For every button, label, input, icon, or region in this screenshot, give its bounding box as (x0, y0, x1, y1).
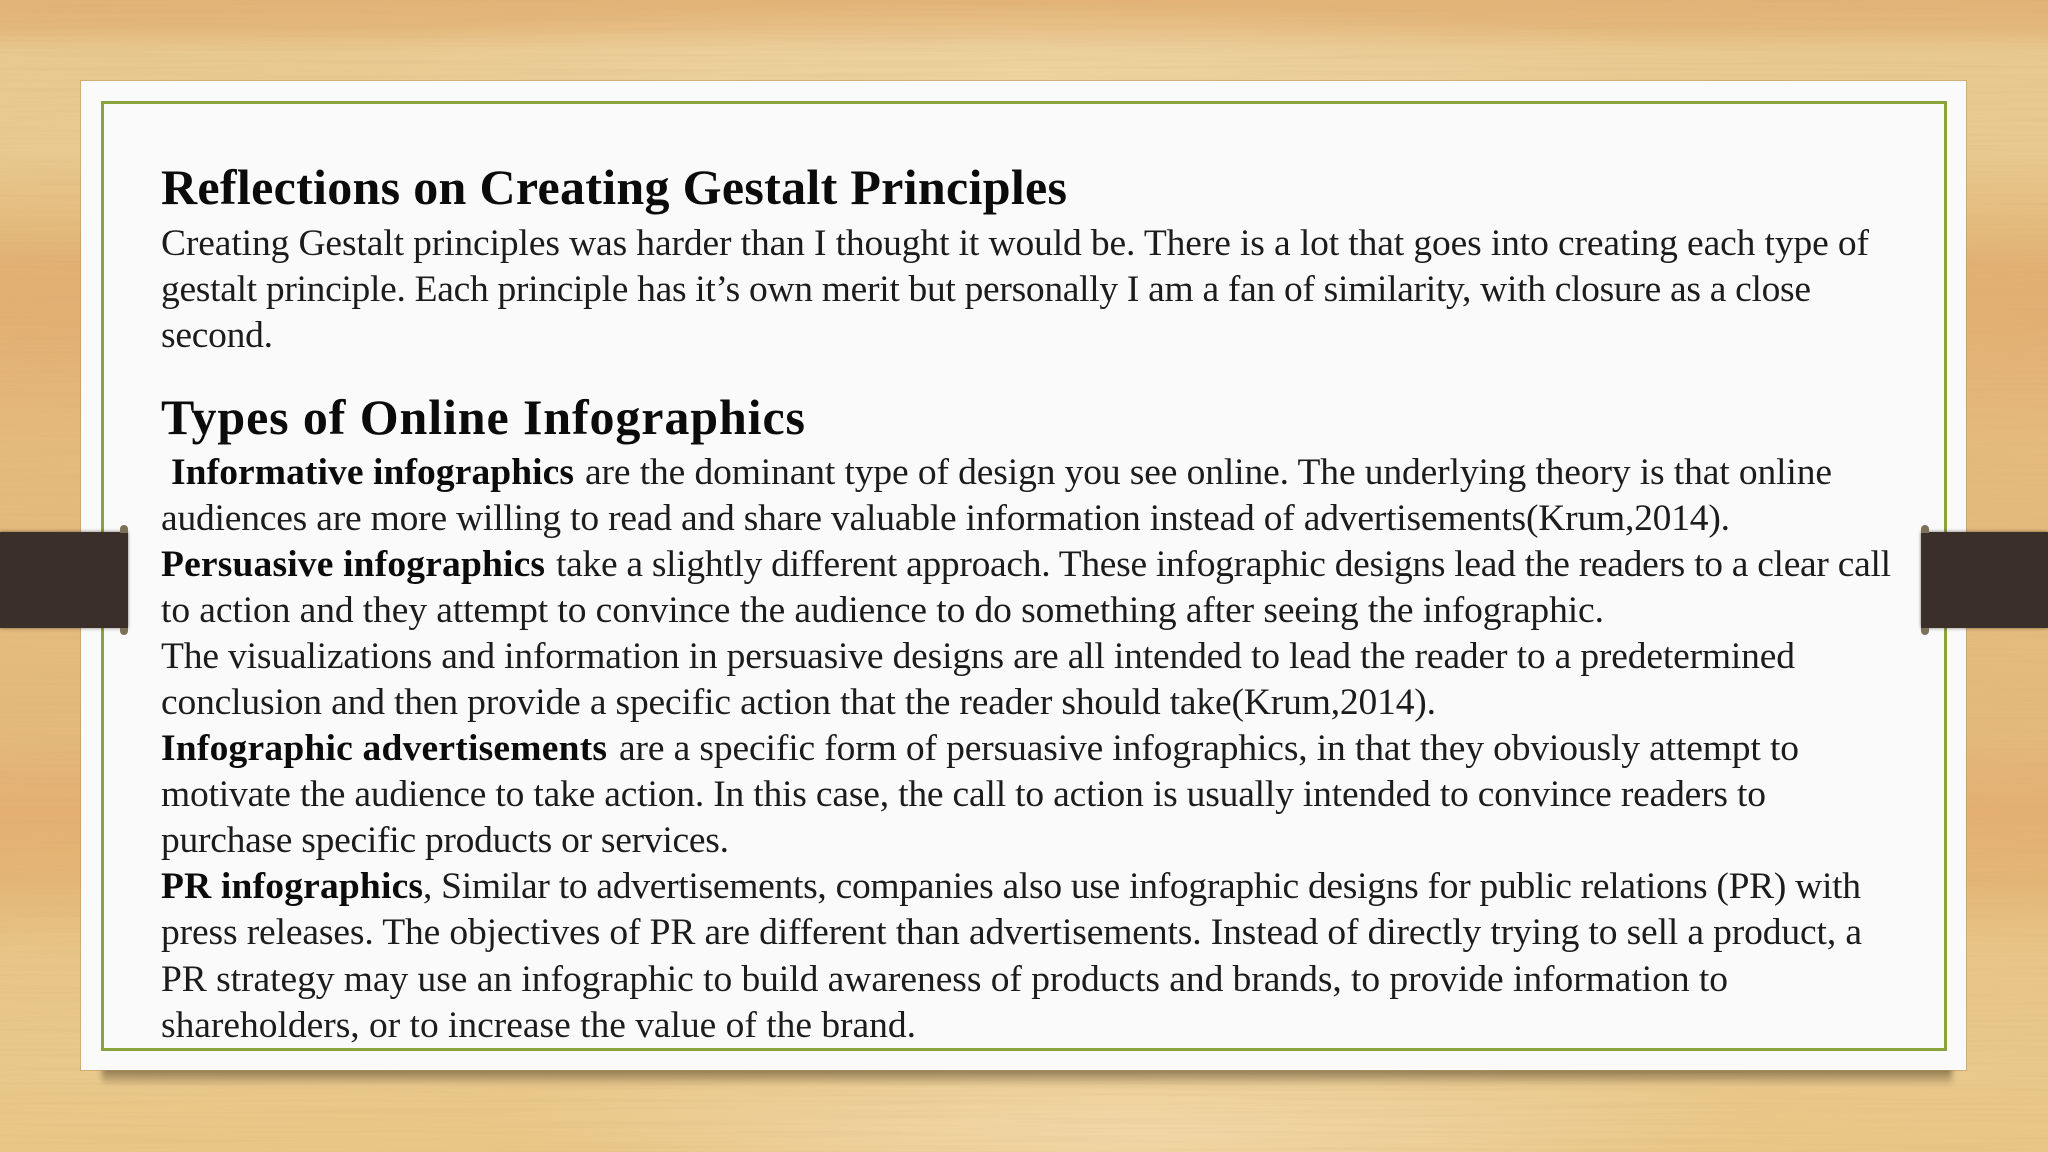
text block: reflections paragraph: gestalt principle. Each principle has it’s own merit but personally I am a fan of similarity, with closure as a close (161, 269, 1811, 310)
text block: infographic advertisements (161, 728, 1799, 861)
text block: persuasive infographics: to action and they attempt to convince the audience to do something after seeing the infographic. (161, 590, 1604, 631)
text block: infographic advertisements: motivate the audience to take action. In this case, the call to action is usually intended to convince readers to (161, 774, 1766, 815)
right strap (1921, 532, 2048, 628)
text block: informative infographics: audiences are more willing to read and share valuable information instead of advertisements(Krum,2014). (161, 498, 1730, 539)
text block: PR infographics (161, 866, 1862, 1046)
text block: infographic advertisements: purchase specific products or services. (161, 820, 729, 861)
text block: PR infographics: , Similar to advertisements, companies also use infographic designs for public relations (PR) with (423, 866, 1861, 907)
text block: PR infographics: PR infographics (161, 866, 423, 907)
heading: reflections: Reflections on Creating Gestalt Principles (161, 159, 1067, 215)
left strap (0, 532, 128, 628)
text block: persuasive infographics: Persuasive infographics (161, 544, 545, 585)
left strap knob (120, 525, 128, 635)
right strap knob (1921, 525, 1929, 635)
green inner frame (101, 101, 1947, 1051)
text block: PR infographics: press releases. The objectives of PR are different than advertisements. Instead of directly trying to sell a product, a (161, 912, 1862, 953)
text block: persuasive infographics (161, 544, 1891, 723)
panel shadow (102, 1056, 1952, 1086)
text block: reflections paragraph: second. (161, 315, 273, 356)
text block: persuasive infographics: conclusion and then provide a specific action that the reader should take(Krum,2014). (161, 682, 1436, 723)
text block: PR infographics: PR strategy may use an infographic to build awareness of products and brands, to provide information to (161, 959, 1728, 1000)
heading: types of online infographics: Types of Online Infographics (161, 389, 805, 445)
text block: informative infographics: Informative infographics (171, 452, 574, 493)
text block: reflections paragraph (161, 223, 1870, 356)
text block: informative infographics: are the dominant type of design you see online. The underlying theory is that online (585, 452, 1832, 493)
text block: PR infographics: shareholders, or to increase the value of the brand. (161, 1005, 916, 1046)
text block: informative infographics (161, 452, 1832, 539)
text block: persuasive infographics: take a slightly different approach. These infographic designs lead the readers to a clear call (556, 544, 1891, 585)
text block: reflections paragraph: Creating Gestalt principles was harder than I thought it would be. There is a lot that goes into creating each type of (161, 223, 1870, 264)
panel: white card (81, 81, 1966, 1070)
text block: infographic advertisements: Infographic advertisements (161, 728, 607, 769)
text block: persuasive infographics: The visualizations and information in persuasive designs are all intended to lead the reader to a predetermined (161, 636, 1795, 677)
text block: infographic advertisements: are a specific form of persuasive infographics, in that they obviously attempt to (619, 728, 1799, 769)
